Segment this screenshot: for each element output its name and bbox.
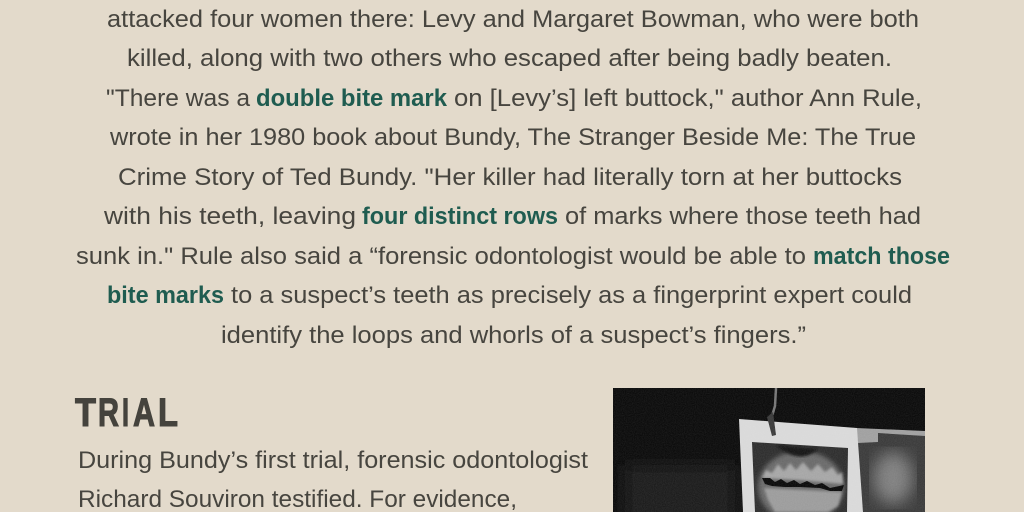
text block: bite mark account: wrote in her 1980 book about Bundy, The Stranger Beside Me: The True bbox=[109, 124, 916, 151]
photo: dental photograph pinned up bbox=[613, 388, 925, 512]
mouth picture bbox=[752, 442, 848, 512]
text block: bite mark account: with his teeth, leaving bbox=[103, 203, 356, 230]
paper print bbox=[739, 419, 863, 512]
text block: trial description: During Bundy’s first trial, forensic odontologist bbox=[78, 447, 588, 474]
clip and string bbox=[767, 388, 776, 436]
second photo on the right bbox=[856, 428, 925, 512]
text block: bite mark account: bite marks bbox=[107, 282, 224, 309]
text block: bite mark account: Crime Story of Ted Bundy. "Her killer had literally torn at her buttocks bbox=[118, 164, 902, 191]
text block: bite mark account: four distinct rows bbox=[362, 203, 558, 230]
text block: bite mark account: sunk in." Rule also said a “forensic odontologist would be able to bbox=[76, 243, 806, 270]
heading: Trial: T bbox=[75, 391, 96, 435]
text block: bite mark account: on [Levy’s] left buttock," author Ann Rule, bbox=[454, 85, 922, 112]
heading: Trial: L bbox=[158, 391, 178, 435]
text block: bite mark account bbox=[76, 6, 950, 349]
text block: bite mark account: "There was a bbox=[106, 85, 251, 112]
text block: bite mark account: killed, along with two others who escaped after being badly beaten. bbox=[127, 45, 892, 72]
text block: bite mark account: identify the loops and whorls of a suspect’s fingers.” bbox=[221, 322, 806, 349]
heading: Trial: R bbox=[98, 391, 119, 435]
text block: bite mark account: double bite mark bbox=[256, 85, 448, 112]
text block: bite mark account: attacked four women there: Levy and Margaret Bowman, who were both bbox=[107, 6, 919, 33]
film grain bbox=[613, 388, 925, 512]
text block: trial description bbox=[78, 447, 588, 512]
heading: Trial: A bbox=[133, 391, 155, 435]
heading: Trial bbox=[75, 391, 178, 435]
text block: bite mark account: of marks where those teeth had bbox=[565, 203, 921, 230]
text block: bite mark account: to a suspect’s teeth as precisely as a fingerprint expert could bbox=[231, 282, 912, 309]
heading: Trial: I bbox=[122, 391, 129, 435]
text block: bite mark account: match those bbox=[813, 243, 950, 270]
